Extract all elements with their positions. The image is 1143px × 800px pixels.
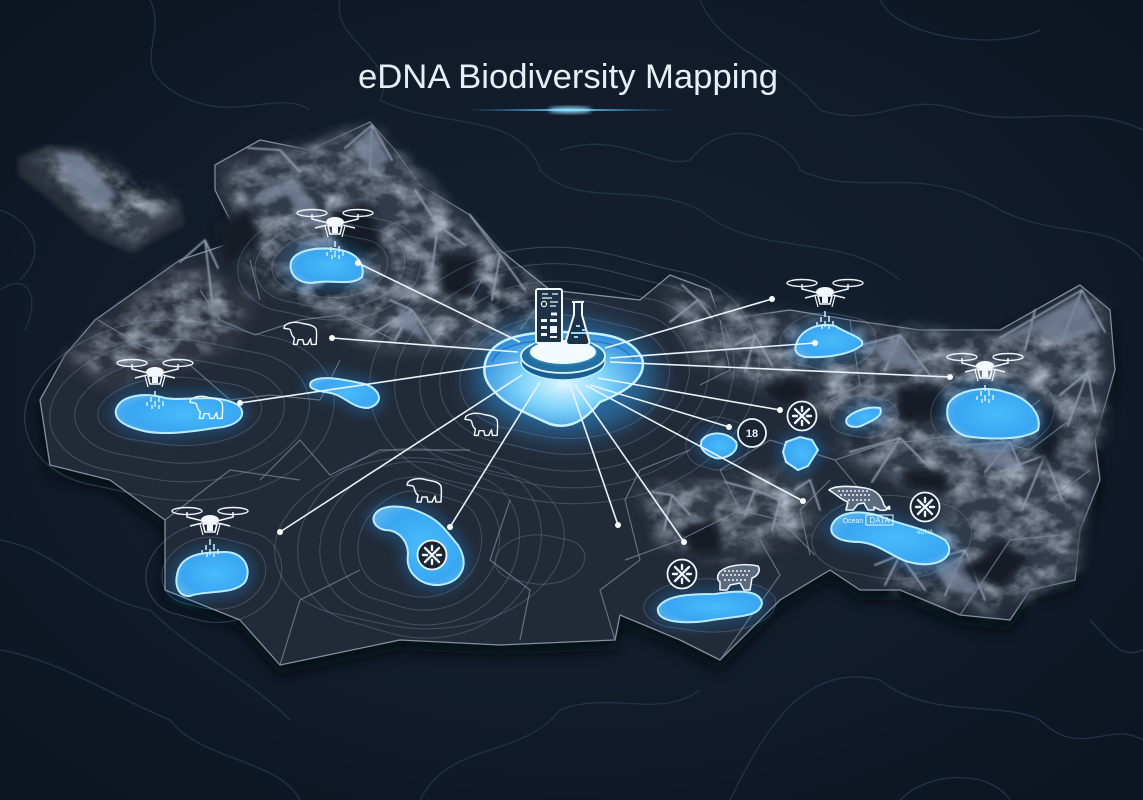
lake labels (843, 515, 933, 536)
circular species markers (418, 402, 940, 588)
detached northwest mountain block (18, 145, 185, 252)
lake labels: DATA (869, 516, 890, 525)
animal icon: spotted bear (718, 565, 759, 590)
drones (117, 210, 1023, 557)
region border lines (98, 250, 1090, 665)
lake: northeast (795, 325, 862, 357)
map shadow (40, 132, 1115, 675)
lake: southwest (176, 552, 248, 596)
lake: south central (373, 506, 464, 585)
icon: flask (566, 302, 589, 345)
mountain shading (60, 125, 1105, 600)
lake: east small 2 (783, 437, 818, 470)
title: eDNA Biodiversity Mapping (358, 58, 778, 96)
map landmass (40, 122, 1115, 665)
lake: west large (116, 395, 242, 433)
animal icon: snow leopard (829, 486, 890, 510)
circular species markers: 18 (746, 428, 758, 440)
dark mountain valleys (215, 200, 1060, 590)
lake: northwest (291, 248, 363, 283)
lake: far east (947, 389, 1039, 438)
snowy ridges (180, 125, 1105, 600)
snow patches (55, 128, 1100, 596)
contour rings (25, 210, 1055, 638)
connector end dots (237, 260, 953, 545)
lake labels: Ocean (843, 518, 863, 525)
lake: south (658, 592, 762, 622)
title underline glow (465, 107, 675, 113)
glow halo around hub (473, 320, 657, 436)
lake: east small 3 (846, 407, 881, 427)
lake: southeast (831, 512, 949, 564)
icon: lab instrument (536, 289, 562, 343)
lake: central small (310, 378, 379, 408)
animal icons: bears (190, 322, 498, 502)
lake: east small 1 (701, 433, 737, 458)
central lab lake (484, 332, 643, 426)
lake labels: eDNA (917, 530, 933, 536)
lab platform (521, 339, 605, 380)
rocky mountain texture (30, 130, 1100, 610)
connector lines from hub to sampling sites (240, 263, 950, 542)
